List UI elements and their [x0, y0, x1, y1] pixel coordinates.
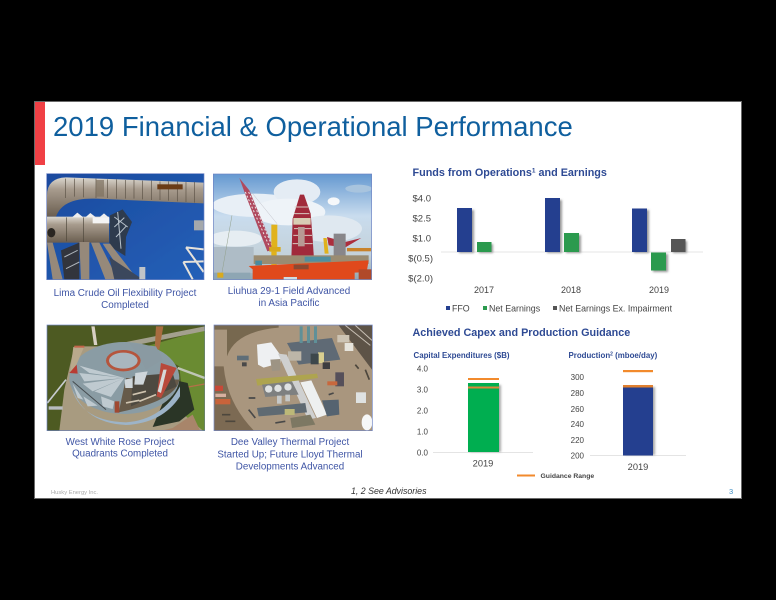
caption: West White Rose: Quadrants Completed [72, 448, 168, 460]
red accent bar [35, 102, 45, 165]
bar shadows [459, 200, 687, 272]
slide panel [34, 102, 742, 498]
chart: capital expenditures: 0.0 [417, 448, 429, 458]
x axis labels: 2018 [561, 285, 581, 295]
caption: West White Rose: West White Rose Project [66, 437, 174, 448]
footer: advisories note: 1, 2 See Advisories [351, 486, 427, 496]
caption: Liuhua: Liuhua 29-1 Field Advanced [228, 286, 350, 297]
bars [457, 198, 686, 270]
heading: Funds from Operations: and Earnings [536, 167, 607, 179]
photo: West White Rose concrete structure [46, 323, 206, 433]
chart: capital expenditures: 2.0 [417, 406, 429, 416]
legend: guidance range [517, 473, 594, 480]
chart: production: 2019 [628, 462, 648, 472]
y axis labels: $(0.5) [408, 254, 433, 264]
chart: production: 300 [571, 373, 585, 382]
caption: Dee Valley: Started Up; Future Lloyd Thermal [217, 450, 363, 460]
legend: guidance range: Guidance Range [540, 473, 594, 480]
heading: Funds from Operations: 1 [532, 168, 536, 174]
bar chart: FFO and earnings [408, 194, 703, 314]
chart: production [568, 351, 686, 472]
legend: Net Earnings Ex. Impairment [559, 304, 673, 314]
x axis labels: 2019 [649, 285, 669, 295]
chart: production: 200 [571, 452, 585, 460]
chart: capital expenditures: Capital Expenditures ($B) [414, 351, 510, 360]
photo: Liuhua offshore rig [209, 172, 374, 282]
caption: Liuhua: in Asia Pacific [259, 298, 320, 309]
chart: capital expenditures [414, 351, 533, 468]
y axis labels [408, 194, 433, 284]
chart: capital expenditures: 1.0 [417, 428, 429, 436]
chart: production: 220 [571, 436, 585, 445]
chart: production: 240 [571, 420, 585, 429]
chart: capital expenditures: 4.0 [417, 364, 429, 374]
x axis labels: 2017 [474, 285, 494, 295]
title: 2019 Financial & Operational Performance [53, 111, 573, 142]
legend: FFO [452, 304, 470, 314]
chart: capital expenditures: 2019 [473, 458, 493, 468]
photo: Lima crude oil pipes [46, 172, 206, 282]
caption: Dee Valley: Developments Advanced [236, 462, 344, 472]
y axis labels: $2.5 [412, 214, 431, 224]
y axis labels: $1.0 [412, 234, 431, 244]
caption: Dee Valley: Dee Valley Thermal Project [231, 437, 349, 448]
chart: production: 260 [571, 405, 585, 414]
x axis labels [474, 285, 669, 295]
caption: Lima: Lima Crude Oil Flexibility Project [54, 288, 196, 299]
chart: production: (mboe/day) [613, 351, 658, 360]
chart: production: 280 [571, 389, 585, 398]
chart: capital expenditures: 3.0 [417, 386, 429, 394]
legend [446, 304, 673, 314]
heading: Achieved Capex: Achieved Capex and Production Guidance [412, 327, 630, 339]
footer: company name: Husky Energy Inc. [51, 490, 98, 496]
y axis labels: $(2.0) [408, 274, 433, 284]
chart: production: 2 [610, 352, 613, 358]
caption: Lima: Completed [101, 300, 149, 311]
y axis labels: $4.0 [412, 194, 431, 204]
photo: Dee Valley thermal site [212, 323, 374, 433]
chart: production: Production [568, 351, 610, 360]
heading: Funds from Operations: Funds from Operations [412, 167, 532, 179]
footer: page number: 3 [729, 487, 733, 496]
legend: Net Earnings [489, 304, 541, 314]
